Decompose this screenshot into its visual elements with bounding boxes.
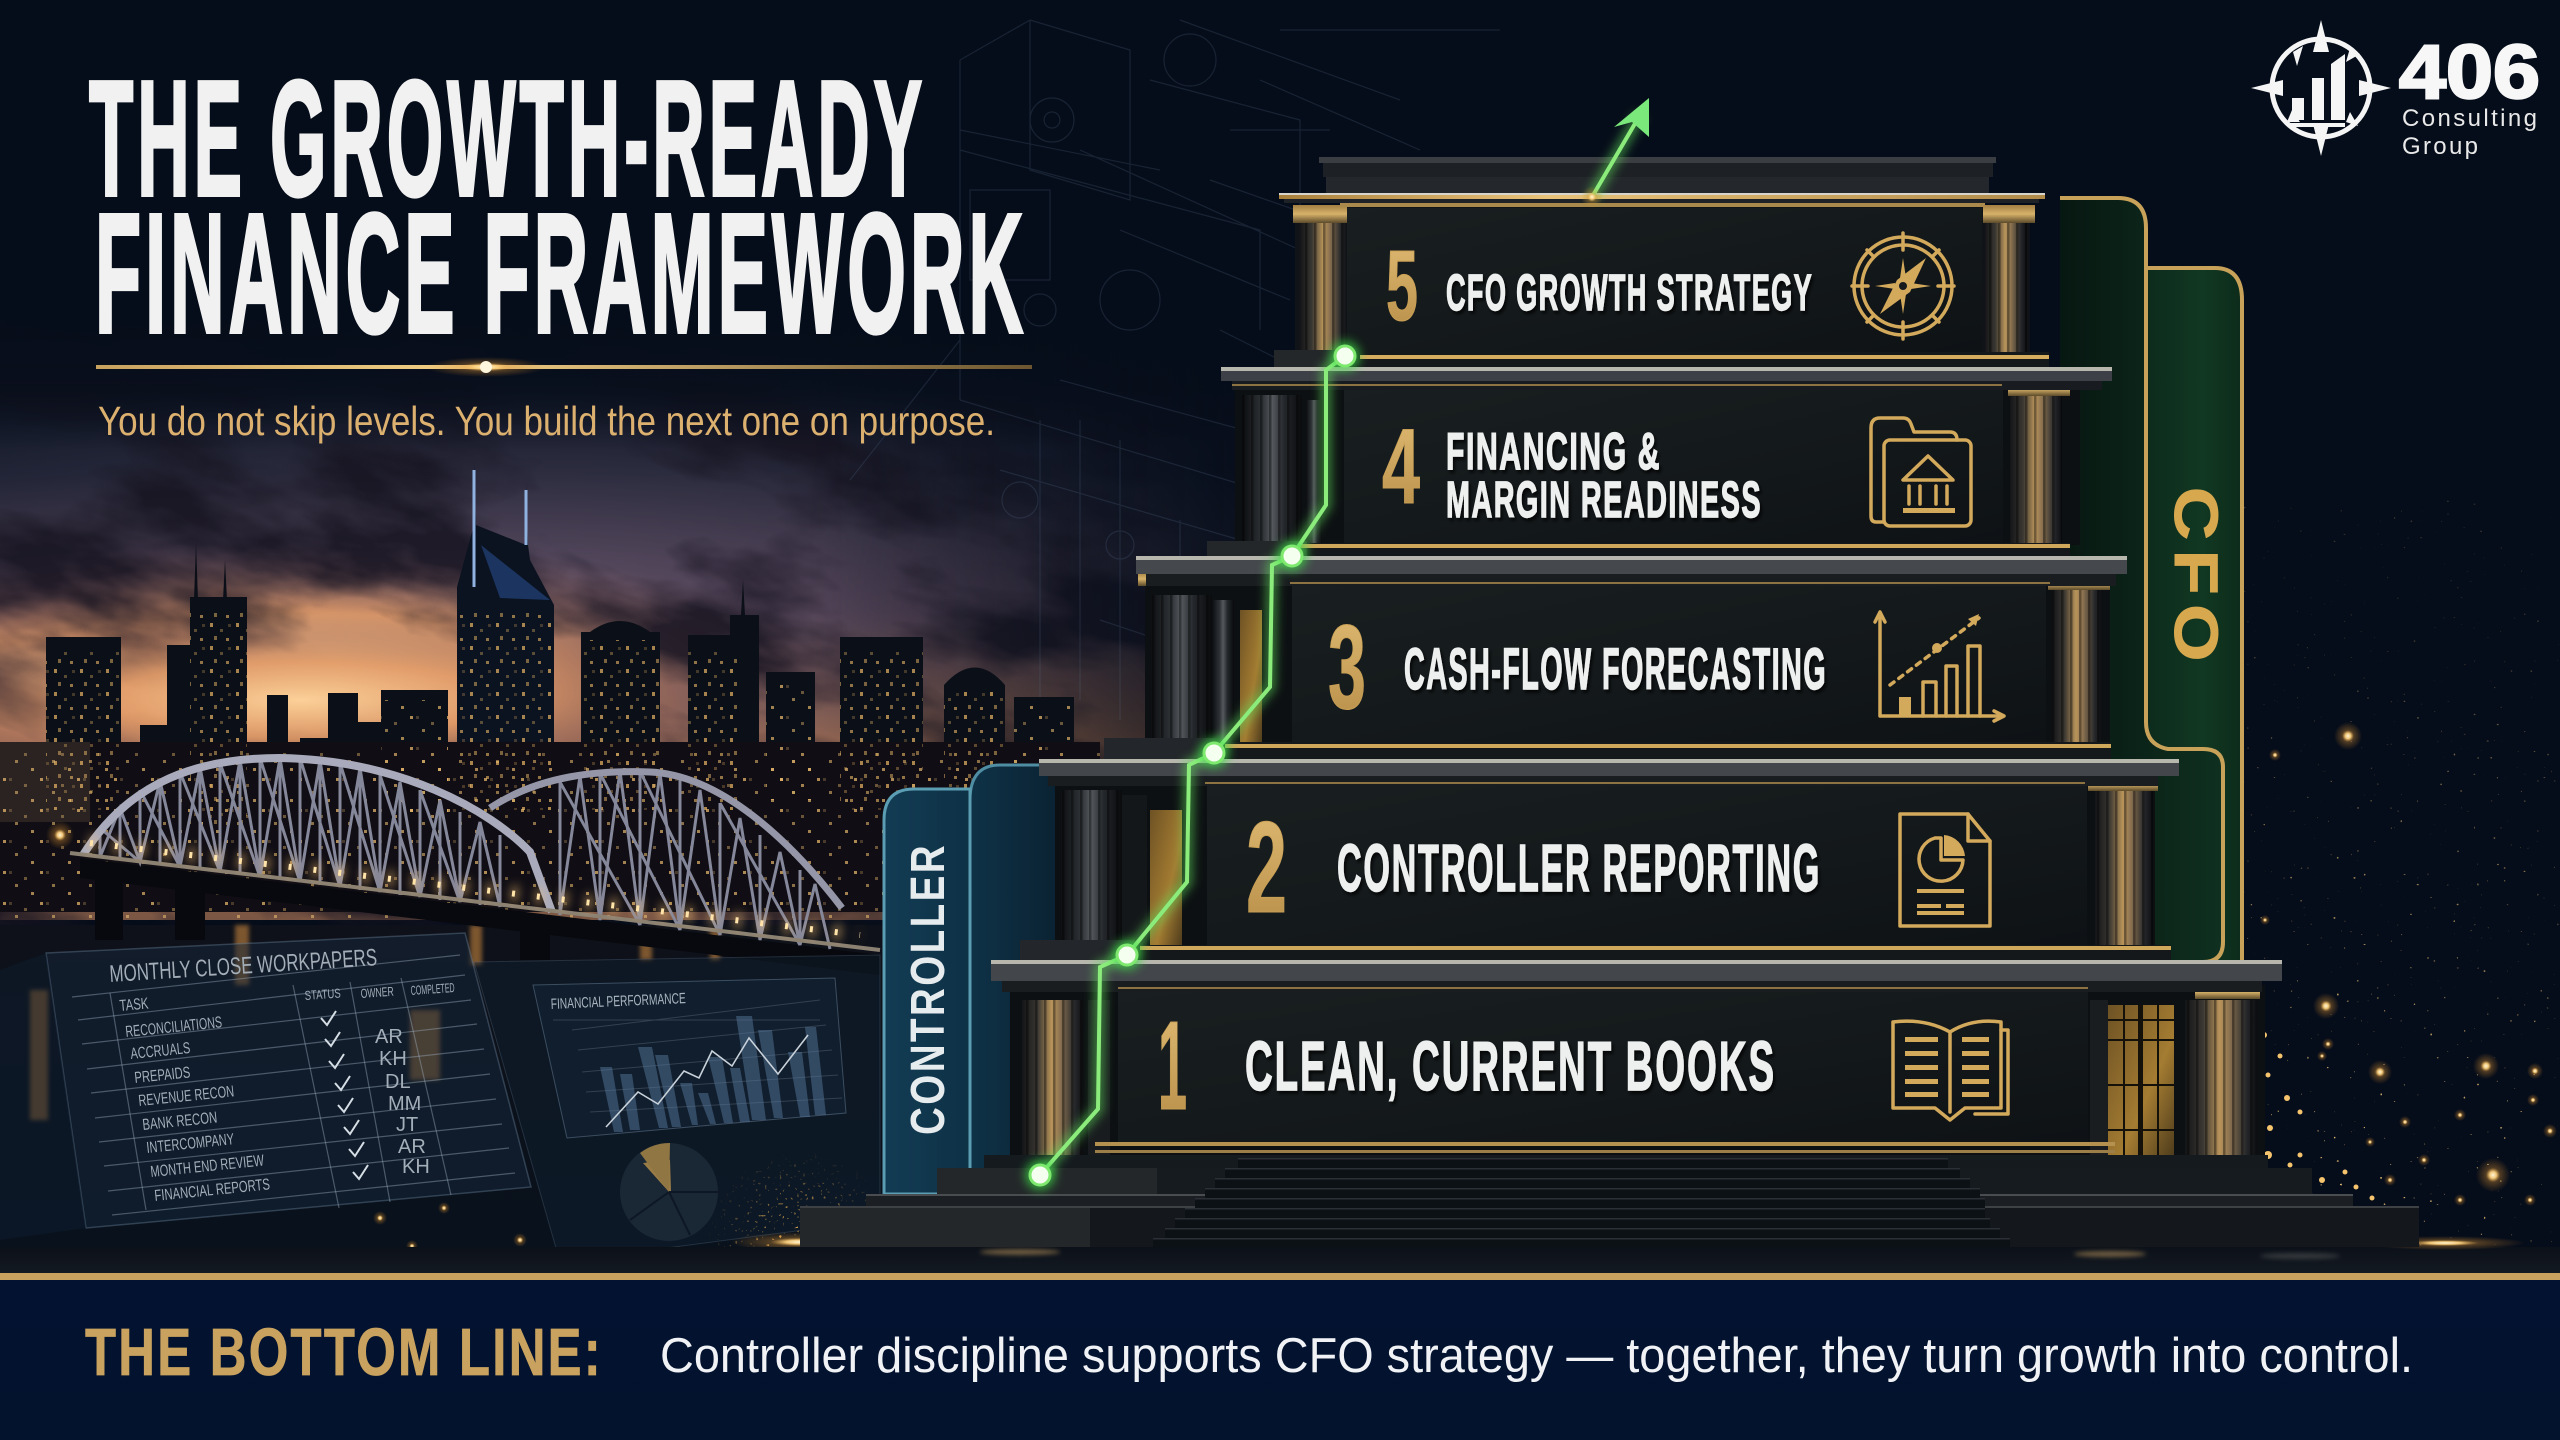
banner: CFO (2060, 197, 2242, 962)
workpapers panel: monthly close: INTERCOMPANY (146, 1131, 235, 1157)
icon: compass (1852, 233, 1954, 339)
workpapers panel: monthly close: DL (385, 1071, 411, 1093)
text: THE GROWTH-READY (89, 47, 926, 230)
panel: financial performance chart (474, 955, 880, 1262)
level 2: controller reporting (1020, 759, 2179, 960)
city skyline (0, 463, 1100, 920)
workpapers panel: monthly close: AR (375, 1026, 403, 1048)
arrow head (1614, 98, 1649, 137)
workpapers panel: monthly close: MM (388, 1093, 421, 1115)
icon: rising bar chart (1875, 612, 2004, 721)
workpapers panel: monthly close: PREPAIDS (134, 1064, 191, 1087)
logo: 406 Consulting Group (2251, 20, 2540, 160)
level 2: controller reporting: 2 (1246, 794, 1287, 940)
level 3: cash-flow forecasting: CASH-FLOW FORECASTING (1404, 637, 1827, 702)
banner: CFO: CFO (2162, 487, 2230, 671)
level 5: CFO growth strategy: 5 (1386, 230, 1418, 342)
level 1: clean, current books: CLEAN, CURRENT BOOKS (1245, 1027, 1776, 1105)
sparks: lower left (374, 1155, 870, 1247)
bridge (46, 758, 880, 975)
temple steps (800, 1155, 2419, 1247)
workpapers panel: monthly close: FINANCIAL REPORTS (154, 1176, 271, 1205)
workpapers panel: monthly close: COMPLETED (410, 980, 455, 998)
river reflections (30, 925, 720, 1120)
sunset sky (0, 404, 1207, 925)
workpapers panel: monthly close: MONTH END REVIEW (150, 1152, 265, 1181)
level 5: CFO growth strategy: CFO GROWTH STRATEGY (1446, 264, 1813, 321)
level 4: financing and margin readiness: MARGIN READINESS (1446, 471, 1762, 528)
blueprint overlay (850, 20, 1500, 780)
workpapers panel: monthly close: OWNER (360, 984, 394, 1001)
river water (0, 925, 1000, 1273)
temple roof (1319, 157, 1996, 195)
footer bar (0, 1273, 2560, 1440)
logo: 406 Consulting Group: Group (2402, 133, 2478, 160)
workpapers panel: monthly close: REVENUE RECON (138, 1083, 235, 1110)
icon: open book (1893, 1021, 2008, 1120)
level 1: clean, current books: 1 (1158, 995, 1187, 1136)
banner: Controller: CONTROLLER (902, 843, 955, 1135)
workpapers panel: monthly close: RECONCILIATIONS (125, 1014, 223, 1041)
level 3: cash-flow forecasting: 3 (1328, 600, 1366, 734)
workpapers panel: monthly close: KH (379, 1048, 407, 1070)
level 3: cash-flow forecasting (1104, 556, 2127, 759)
Batman tower (457, 463, 554, 810)
subtitle: You do not skip levels. You build the next one on purpose. (98, 398, 995, 444)
workpapers panel: monthly close: STATUS (304, 986, 341, 1003)
ground (0, 1236, 2560, 1274)
level 2: controller reporting: CONTROLLER REPORTING (1337, 831, 1821, 906)
level 4: financing and margin readiness: 4 (1382, 406, 1420, 526)
icon: folder with bank (1871, 418, 1971, 526)
logo compass mark (2251, 20, 2391, 156)
workpapers panel: monthly close: ACCRUALS (130, 1040, 191, 1063)
panel: financial performance chart: FINANCIAL PERFORMANCE (550, 990, 686, 1013)
starfield and sparks (2240, 500, 2560, 1260)
bottom line heading: THE BOTTOM LINE: (85, 1315, 603, 1390)
level 4: financing and margin readiness: FINANCING & (1446, 423, 1661, 481)
title (89, 47, 1027, 369)
workpapers panel: monthly close (0, 933, 531, 1240)
logo: 406 Consulting Group: 406 (2399, 30, 2540, 115)
level 1: clean, current books (991, 960, 2282, 1157)
logo: 406 Consulting Group: Consulting (2402, 105, 2537, 132)
text: FINANCE FRAMEWORK (95, 179, 1027, 369)
workpapers panel: monthly close: BANK RECON (142, 1109, 218, 1134)
level 5: CFO growth strategy (1274, 193, 2049, 367)
workpapers panel: monthly close: MONTHLY CLOSE WORKPAPERS (109, 944, 378, 988)
workpapers panel: monthly close: TASK (119, 996, 149, 1015)
banner: Controller (884, 765, 1060, 1194)
growth path with nodes (1025, 98, 1649, 1190)
bottom line sentence: Controller discipline supports CFO strategy — together, they turn growth into control. (660, 1329, 2413, 1383)
icon: report document (1900, 814, 1990, 926)
title rule (96, 357, 1032, 377)
workpapers panel: monthly close: KH (402, 1156, 430, 1178)
workpapers panel: monthly close: JT (396, 1114, 418, 1136)
level 4: financing and margin readiness (1207, 367, 2112, 556)
workpapers panel: monthly close: AR (398, 1136, 426, 1158)
